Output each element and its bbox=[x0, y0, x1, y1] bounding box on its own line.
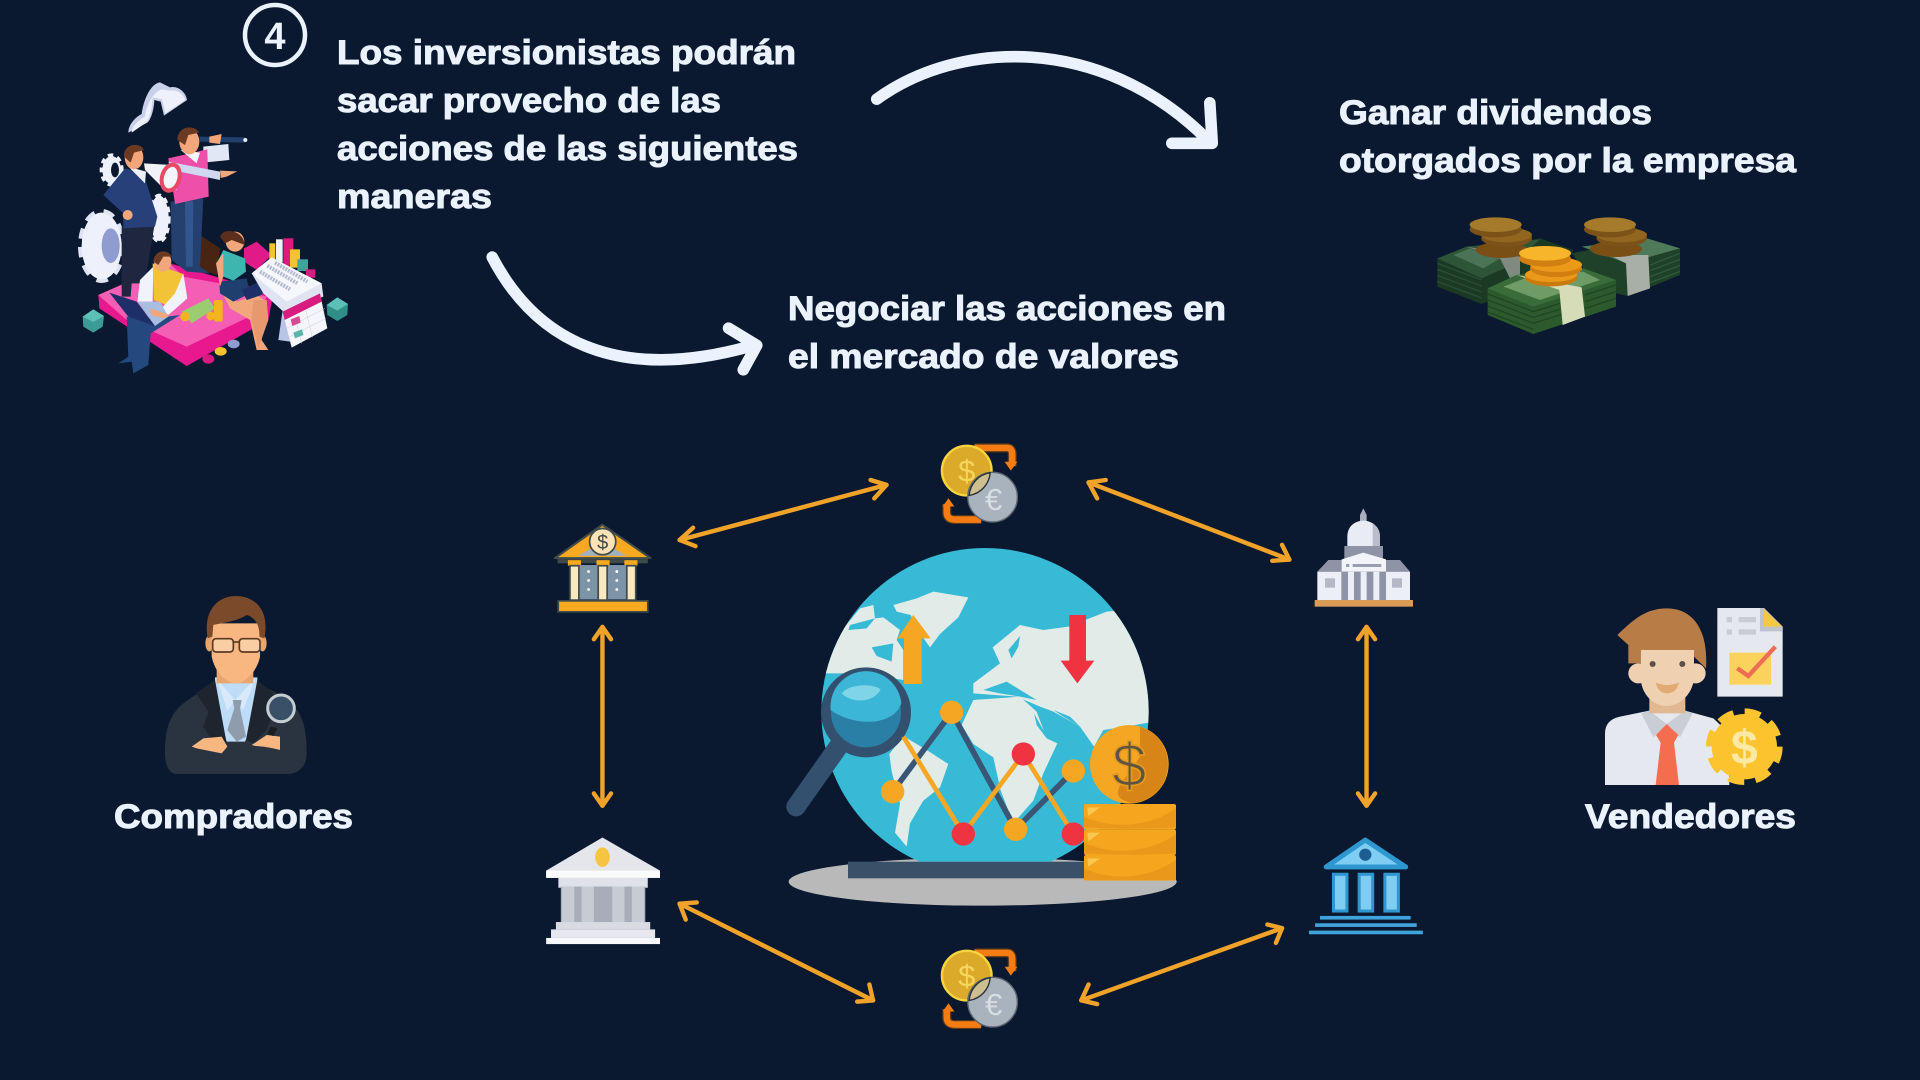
icon: small gear bbox=[102, 156, 121, 184]
coin bbox=[1090, 725, 1169, 804]
intro text block bbox=[337, 34, 798, 216]
dividends text bbox=[1339, 94, 1797, 180]
stack: back left bbox=[1437, 217, 1573, 304]
trading text: el mercado de valores bbox=[788, 338, 1179, 376]
icon: white bank bbox=[546, 838, 660, 944]
inland seas bbox=[848, 618, 1080, 740]
trading text bbox=[788, 290, 1226, 376]
coin stack bbox=[1084, 804, 1176, 881]
intro text block: maneras bbox=[337, 178, 492, 216]
up arrow bbox=[897, 615, 931, 684]
icon: teal cube left bbox=[83, 309, 104, 333]
stack: front bbox=[1488, 246, 1616, 334]
land masses bbox=[820, 592, 1153, 847]
arrow: lower coins to blue bank bbox=[1081, 924, 1282, 1004]
shadow ellipse bbox=[789, 858, 1177, 906]
arrow: to trading bbox=[492, 257, 757, 370]
chart dots bbox=[881, 701, 1085, 846]
calendar bbox=[278, 293, 327, 348]
icon: blue bank bbox=[1309, 840, 1423, 934]
gear: $ bbox=[1731, 721, 1758, 775]
central illustration: globe with chart bbox=[789, 548, 1177, 906]
icon: currency exchange bottom: € bbox=[985, 987, 1002, 1022]
pink cube and bars bbox=[244, 238, 315, 278]
icon: teal cube right bbox=[327, 297, 348, 321]
icon: gold bank: $ bbox=[597, 532, 608, 554]
briefcase bbox=[198, 235, 220, 275]
intro text block: Los inversionistas podrán bbox=[337, 34, 796, 72]
step number badge bbox=[245, 5, 305, 65]
document bbox=[1717, 608, 1783, 697]
magnifier bbox=[796, 671, 906, 807]
globe bbox=[820, 548, 1153, 875]
icon: buyer with magnifier bbox=[165, 596, 307, 774]
down arrow bbox=[1061, 615, 1094, 683]
icon: currency exchange top bbox=[942, 446, 1017, 522]
coin: $ bbox=[1112, 732, 1146, 801]
dividends text: Ganar dividendos bbox=[1339, 94, 1652, 132]
gear bbox=[1712, 714, 1777, 779]
money and coins bbox=[180, 298, 240, 364]
illustration: money stacks bbox=[1437, 217, 1680, 334]
man with megaphone bbox=[103, 145, 185, 297]
arrow: gold bank to white bank bbox=[594, 627, 611, 806]
icon: capitol building bbox=[1315, 508, 1413, 607]
illustration: investors team bbox=[82, 82, 348, 373]
label: sellers: Vendedores bbox=[1585, 798, 1796, 836]
body bbox=[1605, 711, 1729, 785]
platform bbox=[98, 263, 273, 366]
sitting man with laptop bbox=[109, 251, 187, 373]
label: buyers: Compradores bbox=[114, 798, 353, 836]
icon: currency exchange bottom bbox=[942, 951, 1017, 1027]
chart lines bbox=[893, 712, 1073, 834]
newspaper document bbox=[252, 257, 323, 312]
icon: currency exchange top: $ bbox=[958, 454, 975, 489]
trading text: Negociar las acciones en bbox=[788, 290, 1226, 328]
arrow: gold bank to coins bbox=[680, 480, 887, 546]
icon: seller with gear and document bbox=[1605, 608, 1783, 785]
standing man with telescope bbox=[168, 127, 247, 273]
dividends text: otorgados por la empresa bbox=[1339, 142, 1797, 180]
intro text block: sacar provecho de las bbox=[337, 82, 721, 120]
icon: cloud arrow bbox=[128, 82, 187, 133]
step number badge: 4 bbox=[264, 16, 286, 58]
intro text block: acciones de las siguientes bbox=[337, 130, 798, 168]
stack: back right bbox=[1572, 217, 1680, 296]
network arrows bbox=[594, 480, 1375, 1004]
icon: gold bank bbox=[555, 525, 651, 612]
arrow: capitol to blue bank bbox=[1358, 627, 1375, 806]
arrow: coins to capitol bbox=[1089, 480, 1289, 561]
icon: rear gear bbox=[150, 196, 169, 241]
icon: large gear bbox=[82, 213, 122, 279]
icon: currency exchange bottom: $ bbox=[958, 959, 975, 994]
icon: currency exchange top: € bbox=[985, 482, 1002, 517]
stand bbox=[848, 862, 1085, 878]
head bbox=[1649, 697, 1685, 713]
sitting woman bbox=[216, 231, 273, 350]
arrow: white bank to lower coins bbox=[680, 902, 873, 1002]
arrow: to dividends bbox=[877, 57, 1212, 143]
